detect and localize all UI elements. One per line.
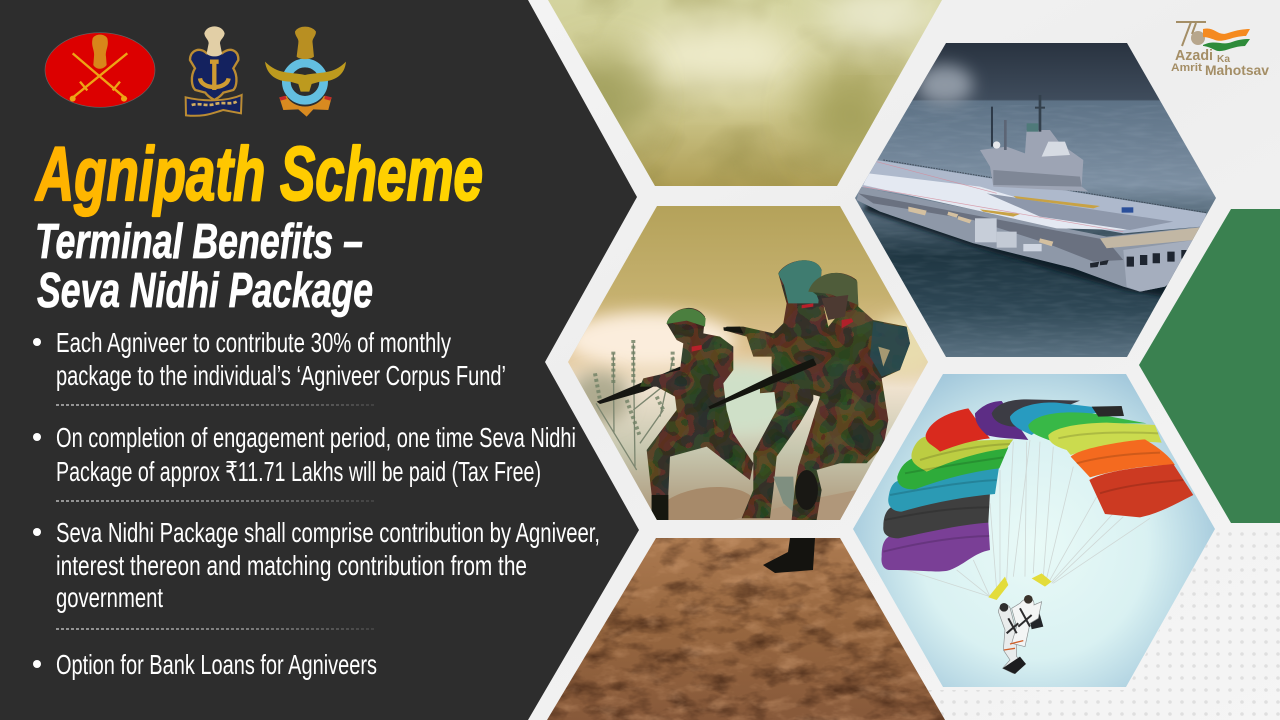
image panel: smoke hexagon bbox=[540, 0, 950, 190]
soldier: middle bbox=[723, 260, 828, 518]
bullet: corpus fund: Each Agniveer to contribute 30% of monthly bbox=[56, 327, 451, 358]
title: Agnipath Scheme bbox=[35, 132, 483, 217]
bullet: package composition bbox=[33, 517, 600, 613]
logo chakra bbox=[1191, 31, 1205, 45]
bullet: bank loans: Option for Bank Loans for Agniveers bbox=[56, 649, 377, 680]
logo: Azadi Ka Amrit Mahotsav: Amrit bbox=[1171, 62, 1202, 74]
bullet: package composition: Seva Nidhi Package shall comprise contribution by Agniveer, bbox=[56, 517, 600, 548]
jumpers bbox=[998, 595, 1043, 674]
ship shadow on water bbox=[863, 197, 1173, 297]
subtitle: Terminal Benefits – bbox=[35, 215, 363, 269]
dotted texture lower right bbox=[850, 529, 1280, 720]
logo flag bbox=[1203, 28, 1250, 41]
image panel: soldiers hexagon bbox=[560, 200, 940, 525]
ship island bbox=[980, 130, 1088, 192]
bullet: bank loans bbox=[33, 649, 377, 680]
bullet: package composition: interest thereon and matching contribution from the bbox=[56, 550, 527, 581]
flight deck bbox=[860, 160, 1207, 233]
bullet: Seva Nidhi amount: On completion of engagement period, one time Seva Nidhi bbox=[56, 422, 576, 453]
image panel: parachute hexagon bbox=[850, 370, 1220, 690]
bullet: Seva Nidhi amount: Package of approx ₹11.71 Lakhs will be paid (Tax Free) bbox=[56, 456, 541, 487]
green hexagon bbox=[1139, 209, 1280, 523]
soldier: left bbox=[597, 308, 753, 520]
bullet: package composition: government bbox=[56, 582, 163, 613]
logo: Azadi Ka Amrit Mahotsav: Ka bbox=[1217, 54, 1230, 65]
emblem: Indian Navy bbox=[186, 26, 242, 116]
shrubs bbox=[595, 340, 857, 523]
logo text: Azadi bbox=[1175, 47, 1213, 64]
ship hull bbox=[857, 187, 1202, 292]
logo: Azadi Ka Amrit Mahotsav bbox=[1171, 22, 1269, 78]
logo: Azadi Ka Amrit Mahotsav: Mahotsav bbox=[1205, 62, 1269, 78]
image panel: aircraft carrier hexagon bbox=[850, 40, 1220, 360]
logo numeral 75 bbox=[1176, 22, 1206, 46]
bullet: corpus fund bbox=[33, 327, 506, 391]
bullet: Seva Nidhi amount bbox=[33, 422, 576, 487]
subtitle: Seva Nidhi Package bbox=[37, 264, 373, 318]
canopy bbox=[881, 399, 1193, 571]
risers bbox=[988, 577, 1008, 600]
soldiers bbox=[597, 260, 910, 520]
suspension lines bbox=[907, 440, 1150, 597]
soldier boot bbox=[763, 538, 815, 573]
bullet: corpus fund: package to the individual’s ‘Agniveer Corpus Fund’ bbox=[56, 360, 506, 391]
image panel: dirt hexagon bbox=[540, 530, 950, 720]
subtitle bbox=[35, 215, 373, 318]
emblem: Indian Air Force bbox=[265, 27, 346, 117]
emblem: Indian Army bbox=[45, 33, 155, 107]
soldier: right bbox=[692, 273, 910, 520]
dark text panel bbox=[0, 0, 639, 720]
